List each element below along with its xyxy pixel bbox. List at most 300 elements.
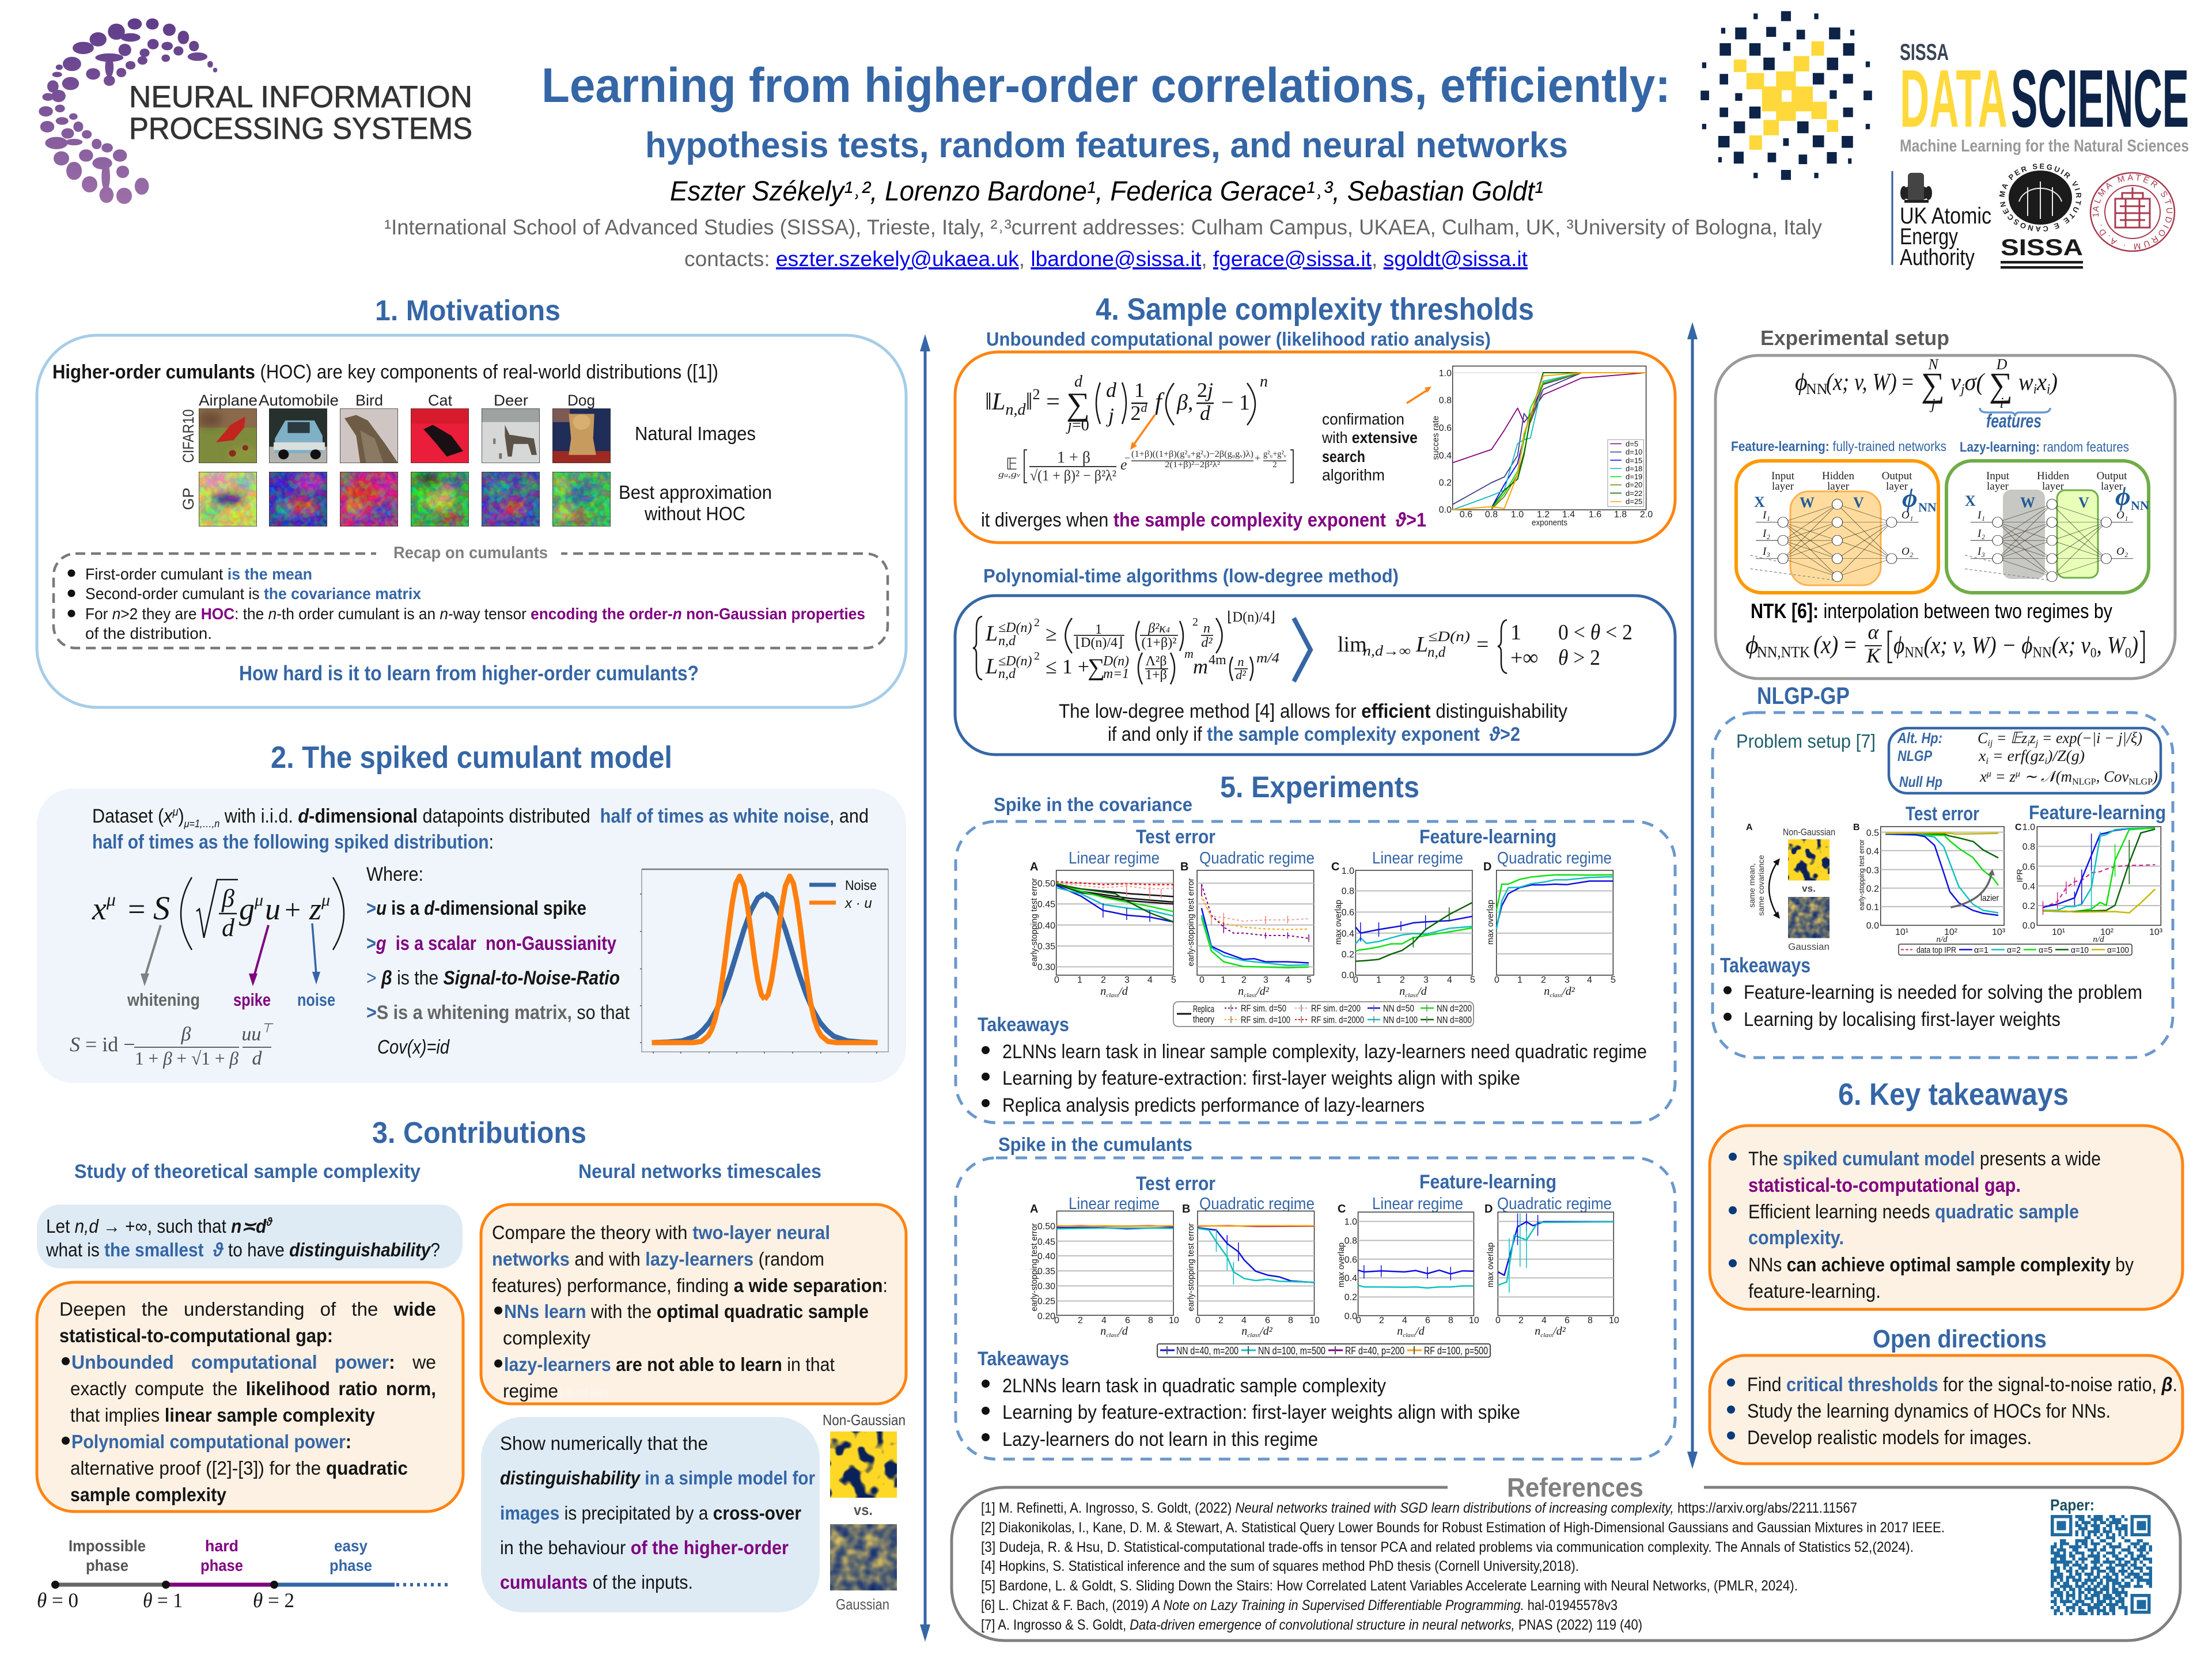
hypothesis box: = 𝔼z	[1993, 729, 2028, 747]
subheading left: Study of theoretical sample complexity	[74, 1161, 421, 1183]
logo: UK Atomic Energy Authority	[1892, 171, 1991, 270]
NTK text: NTK [6]: interpolation between two regimes by	[1751, 599, 2112, 623]
diagram: lazy learning network: ϕ	[2115, 482, 2131, 511]
contacts: contacts: eszter.szekely@ukaea.uk, lbardone@sissa.it, fgerace@sissa.it, sgoldt@sissa.it	[684, 247, 1528, 271]
chart: success rate: 0.8	[1485, 510, 1498, 520]
reference list: [6] L. Chizat & F. Bach, (2019) A Note on Lazy Training in Supervised Differentiable Programming. hal-01945578v3	[981, 1597, 1618, 1613]
formula: NTK: NN,NTK	[1757, 643, 1810, 661]
formula: low-degree bounds: d²	[1201, 635, 1213, 650]
box	[1715, 355, 2175, 679]
hypothesis box: μ	[2015, 769, 2020, 779]
formula: limit: n,d→∞	[1363, 643, 1411, 659]
formula: low-degree bounds: m/4	[1256, 651, 1279, 666]
dataset text	[92, 805, 869, 853]
heading: 1. Motivations	[375, 294, 560, 327]
formula: spiked model	[92, 877, 344, 950]
formula: network: j	[1929, 396, 1936, 412]
charts: NLGP: 10³	[2149, 927, 2163, 937]
box: statistical gap: that implies linear sample complexity	[70, 1404, 376, 1426]
charts: covariance: 0.40	[1037, 921, 1055, 931]
charts: cumulants: 0	[1495, 1316, 1501, 1325]
chart: success rate: d=15	[1626, 456, 1642, 465]
legend: NLGP: α=1	[1974, 945, 1988, 955]
box: compare theory	[481, 1205, 906, 1404]
arrow: whitening	[141, 925, 161, 986]
box: takeaways: The spiked cumulant model presents a wide	[1748, 1148, 2101, 1170]
box: compare theory: complexity	[503, 1327, 590, 1349]
charts: cumulants: B	[1182, 1203, 1190, 1215]
label: paper: Paper:	[2050, 1496, 2094, 1514]
box: compare theory: NNs learn with the optimal quadratic sample	[504, 1301, 869, 1322]
figure: CIFAR10 vs GP grid	[180, 392, 611, 527]
dataset text: )	[178, 805, 184, 827]
formula: low-degree bounds: ⌊D(n)/4⌋	[1227, 609, 1275, 625]
diagram: lazy learning network: I₃	[1977, 546, 1985, 558]
panel: spiked cumulant model	[37, 740, 906, 1083]
charts: covariance: 0.0	[1342, 971, 1354, 980]
diagram: lazy learning network: layer	[2101, 480, 2123, 493]
charts: NLGP: B	[1853, 823, 1860, 832]
formula: low-degree bounds: n	[1203, 621, 1210, 636]
charts: covariance: 0.35	[1037, 942, 1055, 952]
diagram: feature learning network: layer	[1772, 480, 1794, 493]
diagram: feature learning network: NN	[1918, 500, 1937, 514]
formula: LR norm: =	[1040, 389, 1060, 415]
box: open directions	[1710, 1355, 2183, 1464]
dataset text: Dataset (x	[92, 805, 173, 827]
box: question	[37, 1205, 463, 1268]
charts: NLGP	[1853, 823, 2163, 944]
charts: cumulants: class	[1247, 1332, 1260, 1339]
charts: cumulants: 10	[1469, 1316, 1479, 1325]
formula: network: NN	[1806, 381, 1828, 397]
formula: network: i	[2033, 382, 2037, 397]
formula: expectation: +	[1255, 452, 1260, 464]
charts: cumulants: 2	[1518, 1316, 1524, 1325]
conclusion: low-degree	[1059, 700, 1567, 745]
legend: cumulants: NN d=40, m=200	[1176, 1345, 1238, 1357]
chart: success rate: 2.0	[1640, 510, 1653, 520]
formula: network: N	[1927, 356, 1939, 373]
box: question: ϑ	[266, 1216, 273, 1229]
box: numerics: Show numerically that the	[500, 1433, 708, 1454]
charts: NLGP: n/d	[2093, 935, 2104, 944]
formula: NTK: (x; v	[2052, 632, 2090, 659]
diagram: lazy learning network: layer	[2042, 480, 2065, 493]
figure: CIFAR10 vs GP grid: Dog	[567, 392, 595, 409]
chart titles	[1906, 802, 2166, 825]
panel: motivations	[37, 294, 906, 707]
panel background	[37, 789, 906, 1083]
box: polynomial	[955, 596, 1675, 755]
formula: low-degree bounds: ≥	[1046, 622, 1057, 645]
diagram: feature learning network: layer	[1827, 480, 1850, 493]
note: confirmation: with extensive	[1321, 429, 1418, 446]
reference list: [7] A. Ingrosso & S. Goldt, Data-driven emergence of convolutional structure in neural networks, PNAS (2022) 119 (40)	[981, 1617, 1642, 1633]
image: GP 2	[269, 472, 327, 527]
formula: LR norm: d	[1106, 378, 1117, 402]
legend: cumulants: RF d=40, p=200	[1345, 1345, 1404, 1357]
charts: cumulants: 6	[1565, 1316, 1570, 1325]
legend: NLGP: α=5	[2039, 945, 2052, 955]
formula: network: v	[1950, 369, 1961, 396]
arrow: column 3 divider	[1687, 322, 1698, 1469]
box: unbounded	[955, 352, 1675, 543]
charts: cumulants: class	[1540, 1332, 1553, 1339]
formula: expectation: 1 + β	[1057, 449, 1090, 467]
charts: covariance: 0.6	[1342, 908, 1354, 918]
labels: covariance charts: Test error	[1136, 826, 1215, 848]
hypothesis box: Alt. Hp:	[1897, 729, 1942, 747]
labels: cumulants charts: Linear regime	[1069, 1195, 1160, 1213]
takeaways: cumulants: Takeaways	[978, 1348, 1069, 1370]
chart: success rate: 0.2	[1439, 478, 1452, 488]
formula: NTK: 0	[2090, 646, 2096, 661]
diagram: lazy learning network: Input	[1986, 470, 2010, 482]
note: confirmation: search	[1322, 448, 1365, 465]
box: takeaways: NNs can achieve optimal sample complexity by	[1748, 1254, 2134, 1276]
formula: network	[1795, 356, 2058, 412]
charts: covariance: 012345	[1494, 975, 1616, 985]
charts: NLGP: 10¹	[1895, 927, 1908, 937]
formula: LR norm: ‖L	[985, 389, 1005, 415]
image: automobile	[269, 408, 327, 463]
labels: covariance charts: Linear regime	[1372, 849, 1463, 868]
formula: NTK: )	[2130, 632, 2138, 659]
recap bullets: Second-order cumulant is the covariance matrix	[85, 585, 421, 603]
subheading: cumulants: Spike in the cumulants	[998, 1134, 1192, 1155]
hypothesis box: z	[2029, 729, 2036, 747]
charts: cumulants: 8	[1148, 1316, 1153, 1325]
box: compare theory: Compare the theory with two-layer neural	[492, 1222, 830, 1243]
formula: spiked model: +	[285, 893, 301, 926]
figure: CIFAR10 vs GP grid: Airplane	[199, 392, 257, 409]
where list: >S is a whitening matrix, so that	[366, 1002, 630, 1024]
charts: covariance: 0.45	[1037, 900, 1055, 910]
charts: covariance: max overlap	[1486, 900, 1495, 945]
box: takeaways	[1710, 1126, 2183, 1309]
hypothesis box: i	[2045, 756, 2047, 766]
hypothesis box: x	[1980, 768, 1987, 785]
charts: cumulants	[1029, 1203, 1619, 1339]
figure: CIFAR10 vs GP grid: Automobile	[259, 392, 339, 409]
formula: LR norm: 2	[1130, 402, 1141, 425]
legend: NLGP: α=10	[2071, 945, 2089, 955]
formula: low-degree bounds: ∑	[1088, 654, 1105, 681]
arrow labels: spike	[233, 990, 271, 1010]
diagram: lazy learning network: layer	[1987, 480, 2009, 493]
conclusion: low-degree: The low-degree method [4] allows for efficient distinguishability	[1059, 700, 1567, 722]
box: statistical gap: Deepen the understanding of the wide	[59, 1298, 436, 1320]
formula: whitening matrix: β	[181, 1024, 191, 1045]
takeaways: covariance	[978, 1014, 1647, 1116]
dataset text: half of times as the following spiked distribution:	[92, 831, 494, 853]
formula: limit: θ > 2	[1558, 646, 1600, 670]
phase diagram: phase	[86, 1556, 128, 1574]
box: question: what is the smallest ϑ to have distinguishability?	[46, 1239, 440, 1260]
charts: NLGP: 10²	[2100, 927, 2114, 937]
charts: cumulants: 0.6	[1344, 1255, 1357, 1265]
legend: covariance: NN d=200	[1437, 1003, 1472, 1014]
charts: NLGP: 0.6	[2022, 862, 2035, 872]
box: statistical gap: statistical-to-computational gap:	[59, 1325, 333, 1346]
formula: low-degree bounds	[973, 609, 1279, 684]
references heading: References	[1507, 1472, 1643, 1502]
phase diagram: easy	[334, 1537, 368, 1555]
diagram: lazy learning network: V	[2078, 494, 2089, 511]
figure: CIFAR10 vs GP grid: Deer	[494, 392, 528, 409]
formula: NTK: 0	[2125, 646, 2131, 661]
charts: covariance: n	[1100, 985, 1106, 998]
reference list: [1] M. Refinetti, A. Ingrosso, S. Goldt, (2022) Neural networks trained with SGD learn distributions of increasing complexity, https://arxiv.org/abs/2211.11567	[981, 1500, 1857, 1516]
charts: covariance: 1.0	[1342, 866, 1354, 876]
formula: whitening matrix: d	[252, 1048, 263, 1069]
box: takeaways: complexity.	[1748, 1227, 1844, 1249]
chart: noise vs x·u	[640, 869, 888, 1054]
formula: low-degree bounds: L	[985, 654, 998, 679]
takeaways: cumulants: Lazy-learners do not learn in this regime	[1002, 1429, 1318, 1450]
chart: success rate: 1.2	[1537, 510, 1550, 520]
diagram: feature learning network: Output	[1882, 470, 1912, 482]
box: statistical gap: Unbounded computational power: we	[71, 1351, 436, 1373]
recap bullets: First-order cumulant is the mean	[85, 565, 312, 583]
charts: covariance: class	[1244, 992, 1256, 999]
labels: cumulants charts: Quadratic regime	[1497, 1195, 1612, 1213]
formula: low-degree bounds: 1	[1095, 622, 1102, 637]
diagram: feature learning network: ϕ	[1902, 483, 1918, 513]
charts: cumulants: 0.30	[1037, 1282, 1055, 1291]
formula: LR norm: 2	[1032, 386, 1040, 403]
where list: Where:	[366, 863, 423, 885]
charts: covariance: 0.8	[1342, 887, 1354, 896]
diagram: feature learning network: V	[1853, 494, 1864, 511]
heading: Experimental setup	[1760, 326, 1949, 350]
takeaways: covariance: 2LNNs learn task in linear sample complexity, lazy-learners need quadratic regime	[1002, 1041, 1647, 1063]
chart: success rate: 0.6	[1439, 423, 1452, 433]
labels: cumulants charts: Linear regime	[1372, 1195, 1463, 1213]
QR code	[2051, 1515, 2152, 1615]
charts: cumulants: 1.0	[1344, 1217, 1357, 1227]
note: confirmation	[1321, 410, 1418, 484]
figure: CIFAR10 vs GP grid: Bird	[355, 392, 383, 409]
diagram: feature learning network: Hidden	[1822, 470, 1854, 482]
heading: 5. Experiments	[1220, 771, 1419, 804]
heading: open directions: Open directions	[1873, 1325, 2047, 1353]
hypothesis box: NLGP	[2128, 777, 2153, 787]
formula: whitening matrix: uu	[241, 1024, 261, 1045]
chart titles: Test error	[1906, 803, 1979, 825]
diagram: lazy learning network: Hidden	[2037, 470, 2069, 482]
legend: covariance: NN d=50	[1383, 1003, 1414, 1014]
hypothesis box: )	[2152, 768, 2158, 785]
where list: >g is a scalar non-Gaussianity	[366, 933, 616, 955]
takeaways: NLGP: Learning by localising first-layer weights	[1744, 1009, 2061, 1031]
reference list: [4] Hopkins, S. Statistical inference and the sum of squares method PhD thesis (Cornell University,2018).	[981, 1558, 1579, 1574]
icon: SISSA data science checkerboard	[1700, 11, 1872, 180]
subheading: unbounded: Unbounded computational power (likelihood ratio analysis)	[986, 328, 1491, 350]
formula: low-degree bounds: n	[1237, 654, 1244, 669]
formula: expectation: (1+β)((1+β)(g²ᵤ+g²ᵥ)−2β(gᵤgᵥ)λ)	[1131, 449, 1253, 459]
formula: LR norm: d	[1141, 400, 1147, 415]
heading: 4. Sample complexity thresholds	[1096, 292, 1534, 327]
formula: NTK: (x; v, W) − ϕ	[1923, 632, 2033, 659]
labels: regimes	[1731, 439, 2129, 455]
formula: whitening matrix: ⊤	[261, 1021, 274, 1035]
formula: LR norm: d	[1200, 402, 1211, 425]
formula: limit: n,d	[1427, 645, 1446, 660]
formula: limit: 0 < θ < 2	[1558, 620, 1633, 645]
figure: NLGP vs GP samples: Non-Gaussian	[1783, 827, 1835, 838]
hypothesis box: i	[1986, 756, 1988, 766]
subtitle: hypothesis tests, random features, and neural networks	[645, 126, 1568, 165]
box: statistical gap: alternative proof ([2]-[3]) for the quadratic	[70, 1457, 408, 1479]
diagram: lazy learning network: I₂	[1977, 528, 1985, 540]
legend: covariance: NN d=800	[1437, 1014, 1472, 1025]
formula: NTK: K	[1866, 644, 1881, 667]
charts: cumulants: n	[1397, 1325, 1403, 1338]
charts: NLGP: 0.4	[2022, 882, 2035, 892]
recap heading: Recap on cumulants	[393, 544, 548, 562]
charts: covariance: early-stopping test error	[1029, 878, 1039, 967]
formula: network: σ(	[1964, 369, 1986, 396]
charts: cumulants: 0.50	[1037, 1222, 1055, 1232]
charts: NLGP: 1.0	[2022, 823, 2035, 832]
charts: NLGP: n/d	[1936, 935, 1948, 944]
formula: low-degree bounds: (1+β)²	[1142, 635, 1176, 650]
box: takeaways: feature-learning.	[1748, 1281, 1881, 1302]
charts: cumulants: 6	[1265, 1316, 1270, 1325]
formula: spiked model: μ	[106, 889, 116, 910]
charts: cumulants: 8	[1448, 1316, 1453, 1325]
formula: low-degree bounds: ≤D(n)	[998, 620, 1032, 635]
charts: NLGP: 0.1	[1866, 903, 1879, 912]
charts: NLGP: 10¹	[2052, 927, 2065, 937]
subheading right: Neural networks timescales	[578, 1161, 821, 1183]
icon: NeurIPS dots	[40, 18, 217, 204]
formula: NTK: ϕ	[1745, 631, 1759, 659]
formula: limit: 1	[1510, 620, 1521, 645]
recap bullets: of the distribution.	[85, 624, 212, 642]
legend: covariance: RF sim. d=100	[1241, 1014, 1290, 1025]
formula: spiked model: μ	[321, 891, 330, 910]
charts: cumulants: n	[1535, 1325, 1540, 1338]
formula: low-degree bounds: m=1	[1103, 666, 1129, 681]
chart legend	[809, 878, 877, 911]
formula: limit	[1338, 620, 1633, 673]
charts: covariance: n	[1238, 985, 1244, 998]
charts: cumulants: 0	[1195, 1316, 1200, 1325]
charts: cumulants: 10	[1309, 1316, 1320, 1325]
formula: whitening matrix: 1 + β + √1 + β	[135, 1048, 238, 1069]
image: GP 4	[411, 472, 469, 527]
formula: low-degree bounds: 2	[1034, 616, 1040, 629]
panel: references	[952, 1472, 2180, 1641]
box: compare theory: regime	[503, 1380, 558, 1402]
charts: covariance: /d	[1118, 985, 1128, 998]
arrow: column 2 divider	[920, 334, 930, 1642]
formula: limit: =	[1476, 632, 1488, 657]
logo: NeurIPS	[40, 18, 472, 204]
hypothesis box: = exp(−|i − j|/ξ)	[2038, 729, 2142, 747]
charts: cumulants: D	[1484, 1203, 1493, 1215]
hypothesis box: = erf(gz	[1988, 747, 2045, 764]
legend: NLGP	[1899, 944, 2132, 955]
labels: cumulants charts: Test error	[1136, 1173, 1215, 1195]
heading: 6. Key takeaways	[1838, 1077, 2069, 1112]
box: compare theory: networks and with lazy-learners (random	[492, 1248, 824, 1270]
formula: low-degree bounds: m	[1193, 655, 1208, 678]
charts: covariance: 0.50	[1037, 879, 1055, 889]
labels: covariance charts: Quadratic regime	[1199, 849, 1315, 868]
figure: NLGP vs GP samples	[1746, 823, 1835, 952]
label: best approximation: without HOC	[644, 503, 745, 524]
charts: cumulants: /d²	[1259, 1325, 1273, 1338]
charts: cumulants: 0.8	[1344, 1236, 1357, 1246]
diagram: feature learning network: X	[1754, 494, 1765, 510]
formula: expectation: g u,g v	[998, 470, 1021, 479]
problem setup label: Problem setup [7]	[1736, 730, 1876, 752]
charts: cumulants: 0.35	[1037, 1267, 1055, 1277]
formula: network: ϕ	[1795, 369, 1808, 396]
hypothesis box: x	[1979, 747, 1986, 764]
takeaways: covariance: Learning by feature-extraction: first-layer weights align with spike	[1002, 1067, 1520, 1089]
diagram: feature learning network: W	[1800, 494, 1815, 511]
charts: cumulants: 0.45	[1037, 1237, 1055, 1247]
charts: cumulants: n	[1100, 1325, 1106, 1338]
formula: low-degree bounds: 4m	[1209, 653, 1226, 668]
takeaways: NLGP: Feature-learning is needed for solving the problem	[1744, 982, 2142, 1003]
diagram: feature learning network: O₂	[1902, 546, 1914, 558]
label: best approximation	[619, 482, 772, 524]
formula: spiked model: μ	[254, 891, 263, 910]
image: airplane	[199, 408, 257, 463]
authors: Eszter Székely¹˒², Lorenzo Bardone¹, Federica Gerace¹˒³, Sebastian Goldt¹	[670, 176, 1543, 207]
takeaways: NLGP: Takeaways	[1720, 953, 1810, 977]
where list: >u is a d-dimensional spike	[366, 897, 586, 919]
diagram: lazy learning network: Output	[2097, 470, 2127, 482]
image: deer	[482, 408, 540, 463]
formula: whitening matrix: S = id −	[70, 1033, 135, 1056]
formula: low-degree bounds: n,d	[998, 666, 1016, 681]
panel: experiments	[956, 771, 1675, 1459]
charts: cumulants: 6	[1125, 1316, 1130, 1325]
chart: success rate: d=19	[1626, 472, 1642, 481]
chart: success rate: 1.6	[1589, 510, 1601, 520]
chart legend: Noise	[845, 878, 877, 893]
formula: low-degree bounds: d²	[1236, 668, 1246, 682]
recap dashed box	[54, 544, 888, 648]
formula: expectation: e	[1120, 456, 1127, 473]
chart: success rate: d=25	[1626, 497, 1642, 506]
legend: covariance: theory	[1193, 1014, 1214, 1025]
charts: NLGP: IPR	[2015, 869, 2024, 882]
labels: regimes: Feature-learning: fully-trained networks	[1731, 439, 1946, 454]
diagram: feature learning network: I₃	[1762, 546, 1770, 558]
where list: > β is the Signal-to-Noise-Ratio	[366, 967, 620, 989]
takeaways: cumulants	[978, 1348, 1520, 1450]
charts: NLGP: 0.5	[1866, 828, 1879, 838]
phase diagram: Impossible	[69, 1537, 146, 1555]
arrow: spike	[249, 925, 268, 986]
charts: NLGP: 10³	[1992, 927, 2006, 937]
formula: expectation: 𝔼	[1006, 456, 1017, 474]
takeaways: NLGP	[1720, 953, 2142, 1031]
charts: cumulants: 4	[1241, 1316, 1247, 1325]
labels: covariance charts: Quadratic regime	[1497, 849, 1612, 868]
formula: NTK: NN	[2033, 644, 2052, 661]
panel: experimental setup	[1715, 326, 2175, 679]
box: numerics: in the behaviour of the higher-order	[500, 1537, 789, 1558]
